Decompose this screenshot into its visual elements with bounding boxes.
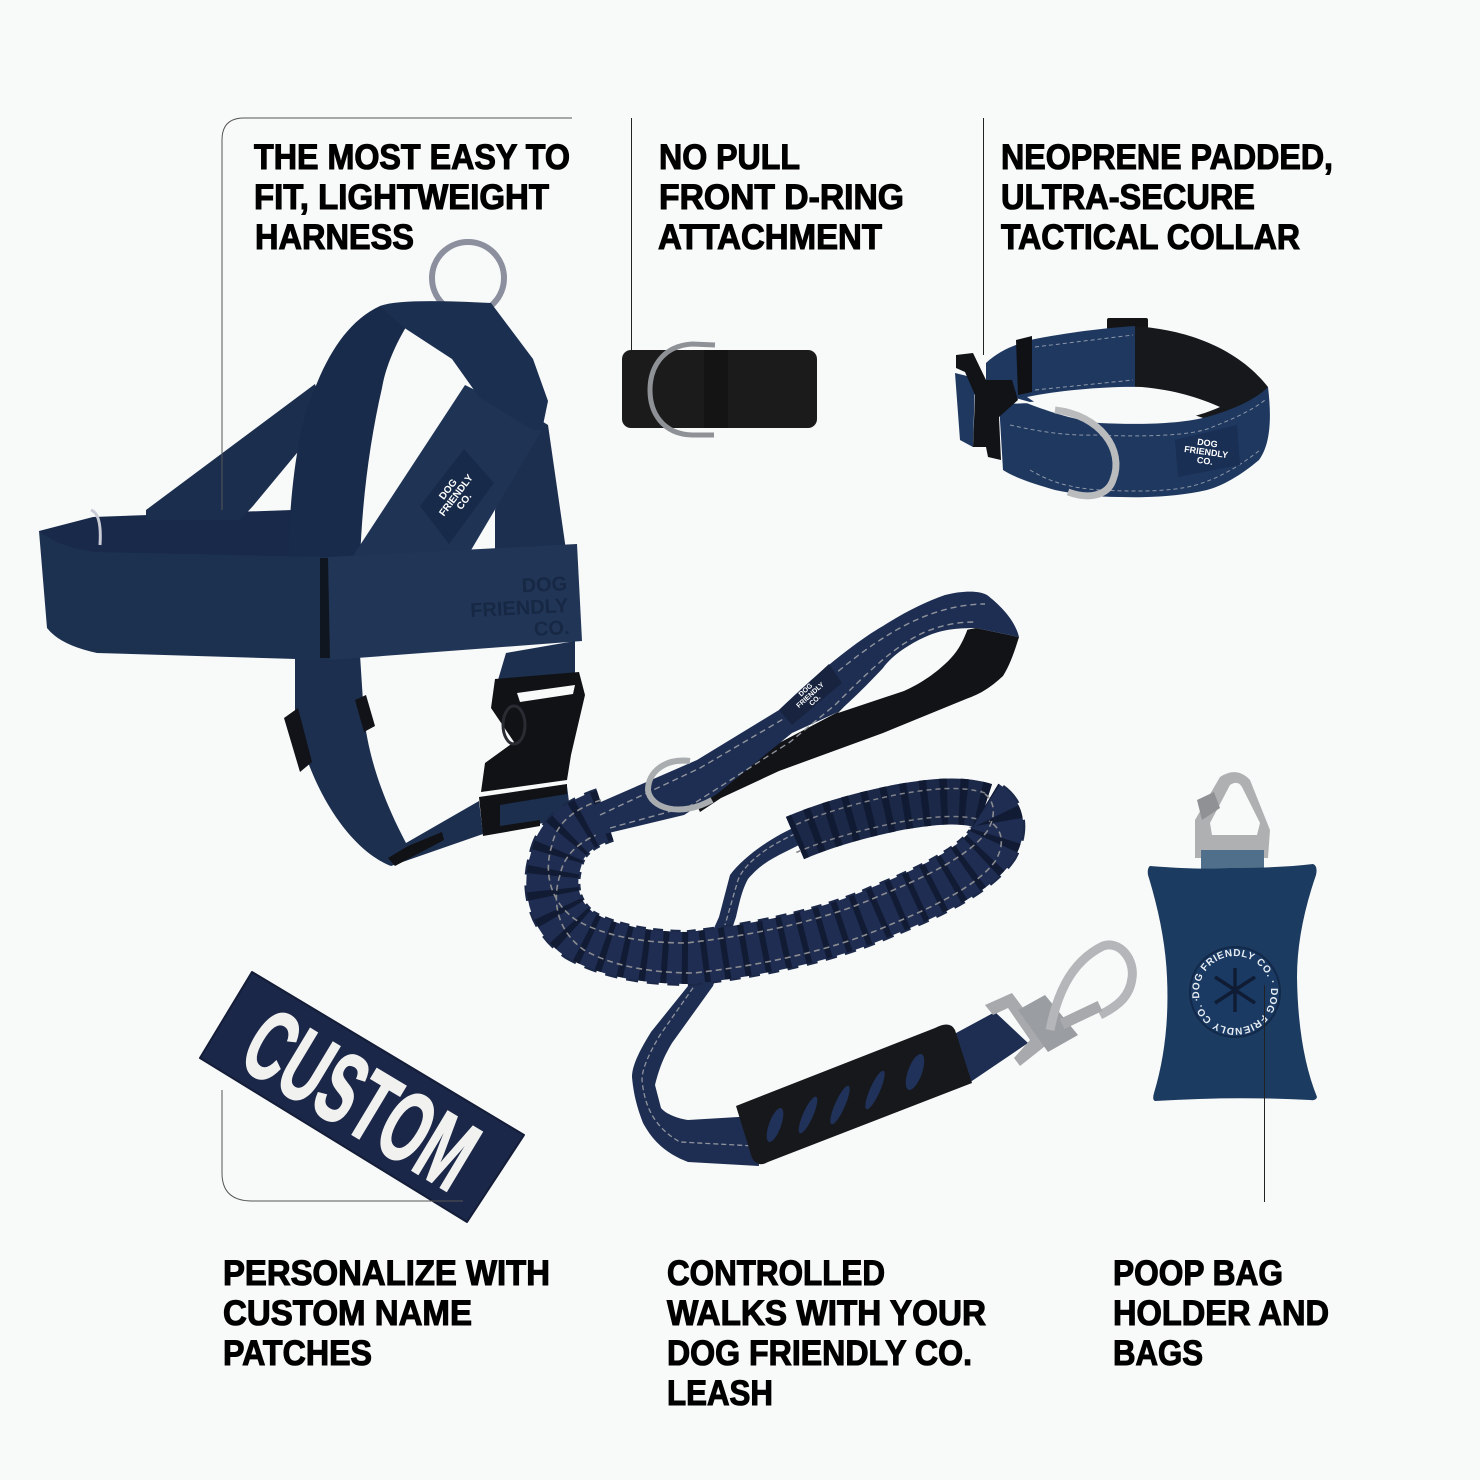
leash handle webbing xyxy=(587,592,1019,836)
connector: patch callout xyxy=(222,1090,463,1201)
harness strap to buckle xyxy=(495,641,575,690)
harness buckle xyxy=(479,672,585,836)
text: no pull feature: NO PULL xyxy=(659,138,800,177)
leash neck strap xyxy=(945,1012,1028,1085)
text: leash feature: CONTROLLED xyxy=(667,1254,885,1293)
text: collar feature: TACTICAL COLLAR xyxy=(1001,218,1300,257)
collar metal buckle xyxy=(956,353,1018,460)
harness slide adjuster xyxy=(284,695,375,772)
collar neoprene lining xyxy=(1130,326,1268,422)
leash handle neoprene xyxy=(690,628,1019,812)
text: harness feature: HARNESS xyxy=(255,218,414,257)
bungee front section xyxy=(548,791,1001,973)
harness top ring xyxy=(432,242,504,314)
text: bag holder feature: HOLDER AND xyxy=(1113,1294,1329,1333)
patch text: CUSTOM xyxy=(224,987,496,1212)
collar label xyxy=(1175,425,1240,477)
harness leather patch: CO. xyxy=(533,617,570,641)
text: no pull feature: FRONT D-RING xyxy=(659,178,904,217)
harness woven label: CO. xyxy=(455,491,474,512)
patch body xyxy=(200,972,524,1222)
leash handle D-ring xyxy=(648,761,712,809)
harness lower buckle strap xyxy=(480,786,571,834)
product: D-ring attachment xyxy=(622,344,817,435)
harness lower left band xyxy=(295,655,483,866)
pouch badge xyxy=(1189,946,1281,1038)
product: bungee leash xyxy=(548,592,1132,1166)
collar front stitching xyxy=(1010,400,1265,491)
harness front belt xyxy=(39,531,330,660)
leash handle label: FRIENDLY xyxy=(796,681,826,710)
text: bag holder feature: POOP BAG xyxy=(1113,1254,1283,1293)
text: harness feature: THE MOST EASY TO xyxy=(254,138,570,177)
pouch body xyxy=(1148,864,1317,1101)
collar front band xyxy=(999,387,1270,497)
collar label: FRIENDLY xyxy=(1184,444,1229,460)
collar rear flap xyxy=(955,373,975,447)
text: leash feature: WALKS WITH YOUR xyxy=(667,1294,986,1333)
text: collar feature xyxy=(1001,138,1333,257)
text: bag holder feature xyxy=(1113,1254,1329,1373)
text: patch feature: CUSTOM NAME xyxy=(223,1294,472,1333)
leash metal swivel clip xyxy=(985,945,1132,1066)
text: collar feature: NEOPRENE PADDED, xyxy=(1001,138,1333,177)
harness right vertical strap xyxy=(495,415,566,560)
text: collar feature: ULTRA-SECURE xyxy=(1001,178,1255,217)
carabiner lock sleeve xyxy=(1197,792,1220,820)
text: leash feature xyxy=(667,1254,986,1413)
collar back loop xyxy=(1016,336,1032,395)
harness back belt xyxy=(39,510,295,560)
product: custom name patch xyxy=(200,972,524,1222)
harness leather patch: DOG xyxy=(521,573,568,597)
leash lower strap xyxy=(632,825,809,1166)
bungee back section xyxy=(795,788,985,853)
carabiner xyxy=(1195,772,1270,858)
harness belt velcro edge xyxy=(320,558,330,658)
connector: harness callout xyxy=(222,118,572,510)
velcro loop xyxy=(704,350,728,428)
collar bracket xyxy=(1107,318,1148,330)
harness leather patch xyxy=(328,544,582,660)
harness leather patch: FRIENDLY xyxy=(470,595,570,622)
harness woven label: FRIENDLY xyxy=(437,473,476,519)
collar back band xyxy=(986,326,1135,402)
text: leash feature: DOG FRIENDLY CO. xyxy=(667,1334,972,1373)
handle stitching xyxy=(600,604,985,828)
collar label: DOG xyxy=(1197,437,1218,449)
harness bottom tip xyxy=(388,832,444,866)
leash handle label: CO. xyxy=(808,694,822,708)
collar inner opening xyxy=(1027,387,1220,423)
leash handle hole xyxy=(838,628,968,713)
text: patch feature: PERSONALIZE WITH xyxy=(223,1254,550,1293)
leash traffic grip xyxy=(736,1024,972,1164)
webbing tab xyxy=(1201,850,1264,870)
collar back stitching xyxy=(1035,335,1133,390)
product: padded collar xyxy=(955,318,1270,497)
text: no pull feature xyxy=(658,138,904,257)
badge text: DOG FRIENDLY CO. · DOG FRIENDLY CO. · xyxy=(1192,949,1278,1035)
product: poop bag holder xyxy=(1148,772,1317,1101)
harness yoke xyxy=(380,301,548,430)
collar D-ring xyxy=(1055,410,1116,496)
text: bag holder feature: BAGS xyxy=(1113,1334,1203,1373)
velcro patch xyxy=(622,350,817,428)
metal D-ring xyxy=(650,344,715,435)
text: no pull feature: ATTACHMENT xyxy=(658,218,882,257)
connector: pouch callout xyxy=(1264,985,1266,1202)
product: harness xyxy=(39,242,585,866)
leash strap stitching xyxy=(642,834,795,1146)
collar label: CO. xyxy=(1196,455,1214,467)
text: harness feature xyxy=(254,138,570,257)
connector: collar callout xyxy=(982,118,984,355)
leash handle label xyxy=(779,664,842,725)
harness left diagonal strap xyxy=(146,384,326,520)
harness right diagonal strap xyxy=(349,385,545,562)
harness woven label: DOG xyxy=(437,477,460,502)
badge asterisk xyxy=(1215,968,1255,1012)
harness small ring xyxy=(91,510,100,545)
harness woven label xyxy=(420,449,494,544)
harness left vertical band xyxy=(288,306,420,562)
text: leash feature: LEASH xyxy=(667,1374,773,1413)
text: patch feature xyxy=(223,1254,550,1373)
text: patch feature: PATCHES xyxy=(223,1334,372,1373)
text: harness feature: FIT, LIGHTWEIGHT xyxy=(254,178,549,217)
leash handle label: DOG xyxy=(798,682,815,698)
connector: d-ring callout xyxy=(630,118,632,350)
